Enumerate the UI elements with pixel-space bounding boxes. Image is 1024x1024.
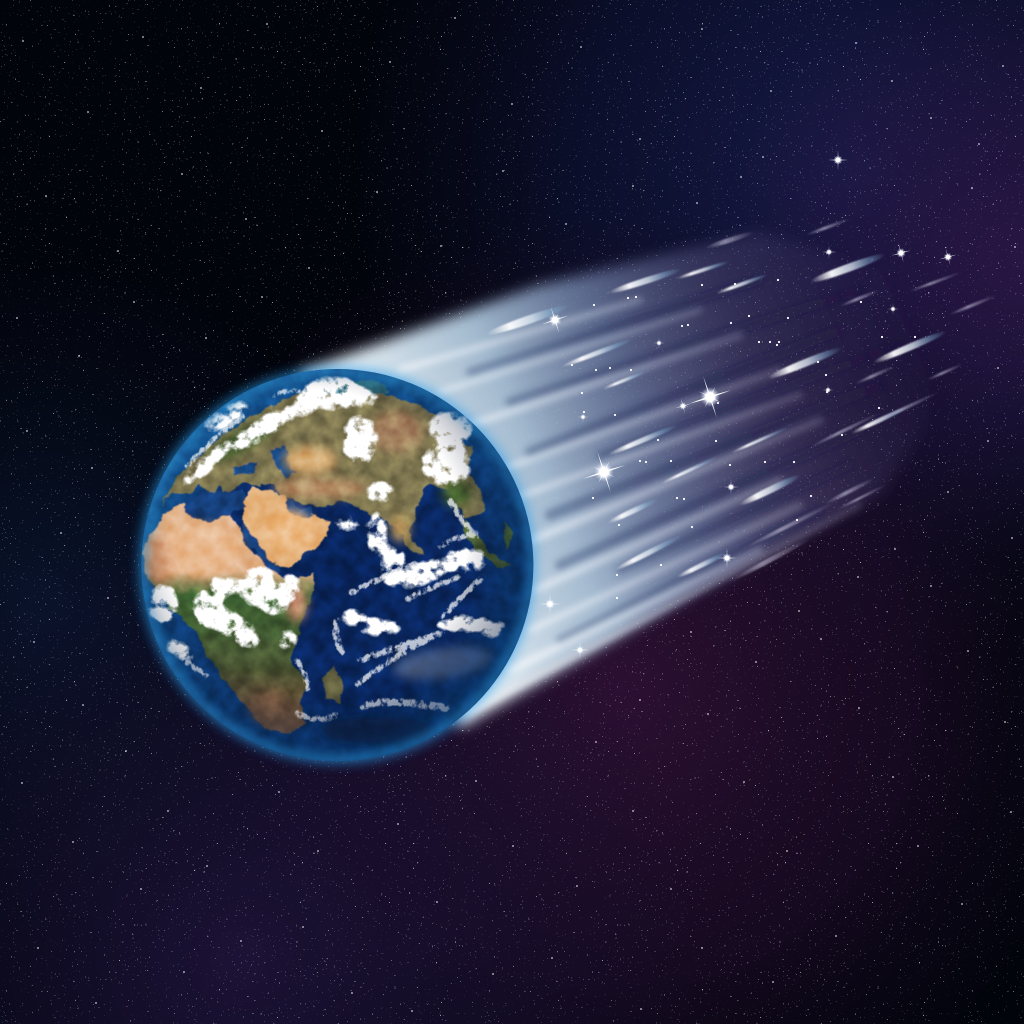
comet trail behind Earth: [300, 217, 998, 728]
limb shading: [141, 369, 533, 761]
Caspian Sea: [273, 446, 297, 477]
atmospheric rim: [143, 371, 531, 759]
Persian Gulf: [286, 500, 315, 521]
continents: [143, 380, 515, 734]
trail: faint grey streaks at the tail end: [704, 217, 998, 583]
terrain and ocean mottling: [142, 369, 530, 754]
land colour patches: [148, 411, 472, 723]
Eurasia: [162, 388, 485, 555]
grey cloud sheets near the southern edge: [320, 642, 495, 743]
trail: small star specks: [572, 280, 915, 598]
Madagascar: [323, 663, 343, 704]
Earth globe: [130, 360, 543, 773]
thin cloud bands and swirls: [180, 391, 483, 719]
Mediterranean: [185, 491, 245, 521]
Africa: [143, 503, 314, 734]
sparkling stars: [537, 150, 959, 659]
Black Sea: [230, 463, 257, 475]
trail: light rays: [400, 300, 860, 712]
cloud masses: [148, 377, 506, 665]
Red Sea: [242, 523, 280, 573]
Earth outer blue glow: [140, 367, 536, 763]
northern ocean tint: [324, 380, 390, 396]
Arabia: [243, 485, 330, 568]
trail: soft base body: [300, 232, 945, 728]
trail: bright lens-shaped streaks: [485, 251, 948, 579]
Southeast Asia: [463, 517, 512, 568]
Borneo: [503, 522, 514, 550]
ocean: [142, 369, 534, 761]
trail: dark gaps between the light rays: [470, 280, 900, 640]
